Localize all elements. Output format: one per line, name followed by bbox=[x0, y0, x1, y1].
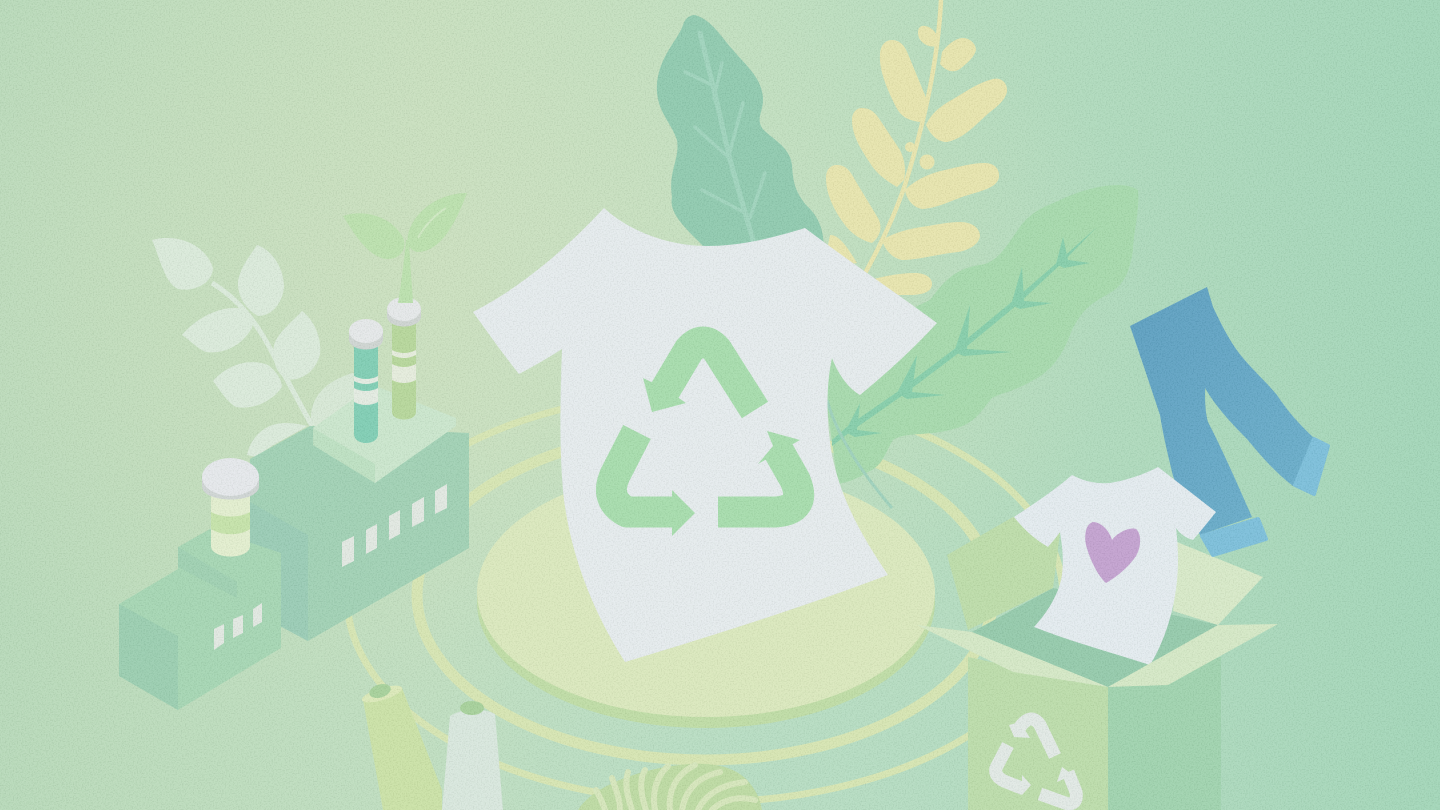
recycle symbol: shirt bbox=[611, 342, 800, 536]
jeans: cuffs bbox=[1202, 439, 1328, 555]
leaf: large green bbox=[826, 185, 1138, 508]
factory: small building bbox=[119, 529, 281, 710]
sprout bbox=[343, 193, 467, 303]
podium disc bbox=[477, 467, 935, 728]
spool: white bbox=[442, 701, 503, 810]
windows: small building bbox=[214, 603, 262, 650]
box: front flaps bbox=[917, 624, 1278, 687]
leaf: teal bbox=[657, 15, 824, 250]
factory: main building bbox=[250, 426, 469, 641]
left plant: pale leaves bbox=[152, 238, 370, 457]
yarn ball bbox=[578, 764, 762, 810]
big t-shirt bbox=[473, 208, 937, 662]
chimney: small building bbox=[202, 458, 259, 556]
small t-shirt bbox=[1014, 467, 1216, 665]
box: front faces bbox=[968, 657, 1108, 810]
leaf branch: yellow bbox=[826, 0, 1007, 295]
box: inside bbox=[972, 588, 1218, 687]
leaf veins: teal bbox=[685, 33, 765, 240]
factory: roof box bbox=[313, 385, 456, 483]
cardboard box bbox=[947, 517, 1263, 810]
windows: main building bbox=[342, 484, 447, 567]
jeans bbox=[1130, 287, 1328, 555]
concentric rings bbox=[347, 392, 1063, 802]
recycle symbol: box bbox=[996, 719, 1076, 804]
chimney: teal bbox=[349, 319, 383, 443]
chimney: green bbox=[387, 297, 421, 420]
spool: green bbox=[360, 682, 442, 810]
heart bbox=[1085, 522, 1140, 583]
box: back flaps bbox=[947, 517, 1060, 630]
leaf veins: large green bbox=[832, 227, 1097, 446]
